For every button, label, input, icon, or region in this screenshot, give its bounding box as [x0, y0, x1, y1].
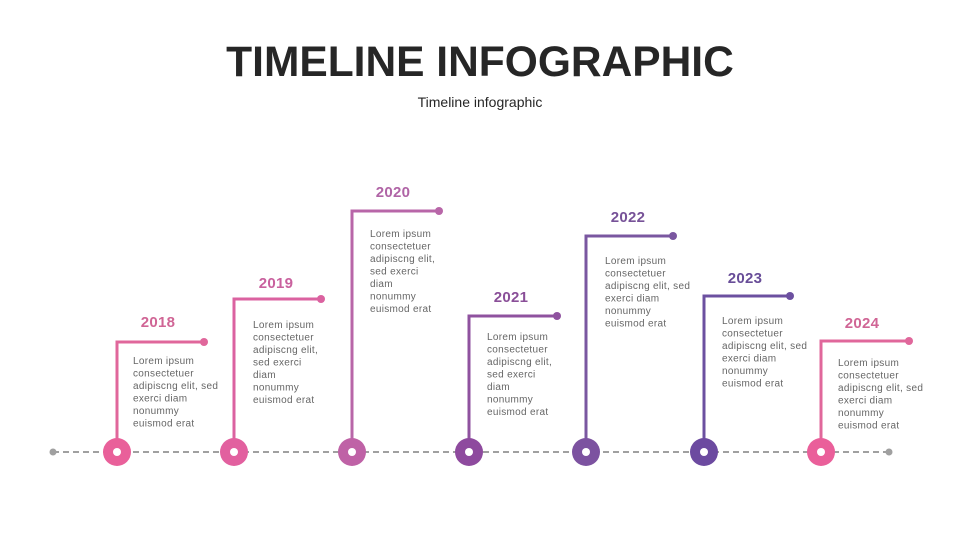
- milestone: 2018: exerci diam: [133, 394, 187, 404]
- milestone: 2023: euismod erat: [722, 378, 783, 390]
- milestone: 2021: [455, 289, 561, 466]
- milestone: 2020: euismod erat: [370, 304, 431, 315]
- milestone: 2018: nonummy: [133, 406, 179, 417]
- milestone: 2023: 2023: [728, 270, 762, 287]
- milestone: 2024: 2024: [845, 315, 880, 332]
- milestone: 2019: diam: [253, 370, 276, 381]
- milestone: 2021: euismod erat: [487, 407, 548, 418]
- milestone: 2023: [690, 270, 807, 466]
- milestone: 2021: adipiscng elit,: [487, 357, 552, 368]
- milestone: 2021: nonummy: [487, 394, 533, 406]
- milestone: 2021: Lorem ipsum: [487, 332, 548, 343]
- milestone: 2024: euismod erat: [838, 420, 899, 432]
- milestone: 2023: consectetuer: [722, 328, 783, 340]
- milestone: 2024: exerci diam: [838, 396, 892, 406]
- milestone: 2020: sed exerci: [370, 266, 419, 278]
- milestone: 2022: adipiscng elit, sed: [605, 281, 690, 292]
- milestone: 2018: consectetuer: [133, 368, 194, 380]
- milestone: 2020: diam: [370, 279, 393, 290]
- milestone: 2022: euismod erat: [605, 318, 666, 330]
- milestone: 2021: consectetuer: [487, 344, 548, 356]
- milestone: 2019: 2019: [259, 275, 293, 292]
- milestone: 2018: 2018: [141, 314, 175, 331]
- title: TIMELINE INFOGRAPHIC: [226, 39, 734, 86]
- milestone: 2019: adipiscng elit,: [253, 345, 318, 356]
- milestone: 2023: adipiscng elit, sed: [722, 341, 807, 352]
- milestone: 2019: [220, 275, 325, 466]
- milestone: 2020: [338, 184, 443, 466]
- milestone: 2019: Lorem ipsum: [253, 320, 314, 331]
- milestone: 2024: nonummy: [838, 408, 884, 419]
- milestone: 2021: sed exerci: [487, 370, 536, 380]
- milestone: 2020: nonummy: [370, 292, 416, 302]
- milestone: 2020: Lorem ipsum: [370, 229, 431, 240]
- milestone: 2023: nonummy: [722, 366, 768, 377]
- timeline axis: [50, 448, 892, 456]
- milestone: 2019: sed exerci: [253, 358, 302, 368]
- milestone: 2018: adipiscng elit, sed: [133, 381, 218, 392]
- milestone: 2023: exerci diam: [722, 354, 776, 364]
- milestone: 2018: euismod erat: [133, 418, 194, 430]
- milestone: 2019: euismod erat: [253, 395, 314, 406]
- milestone: 2020: adipiscng elit,: [370, 254, 435, 265]
- milestone: 2023: Lorem ipsum: [722, 316, 783, 327]
- milestone: 2024: [807, 315, 923, 466]
- subtitle: Timeline infographic: [418, 94, 542, 110]
- milestone: 2022: 2022: [611, 209, 645, 226]
- milestone: 2020: consectetuer: [370, 242, 431, 252]
- milestone: 2022: exerci diam: [605, 294, 659, 304]
- milestone: 2022: nonummy: [605, 306, 651, 317]
- milestone: 2018: [103, 314, 218, 466]
- milestone: 2020: 2020: [376, 184, 410, 201]
- milestone: 2022: consectetuer: [605, 268, 666, 280]
- milestone: 2021: diam: [487, 382, 510, 393]
- milestone: 2024: adipiscng elit, sed: [838, 383, 923, 394]
- milestone: 2022: [572, 209, 690, 466]
- milestone: 2019: nonummy: [253, 382, 299, 394]
- milestone: 2024: Lorem ipsum: [838, 358, 899, 369]
- milestone: 2019: consectetuer: [253, 332, 314, 344]
- milestone: 2022: Lorem ipsum: [605, 256, 666, 267]
- milestone: 2021: 2021: [494, 289, 528, 306]
- milestone: 2024: consectetuer: [838, 370, 899, 382]
- milestone: 2018: Lorem ipsum: [133, 356, 194, 367]
